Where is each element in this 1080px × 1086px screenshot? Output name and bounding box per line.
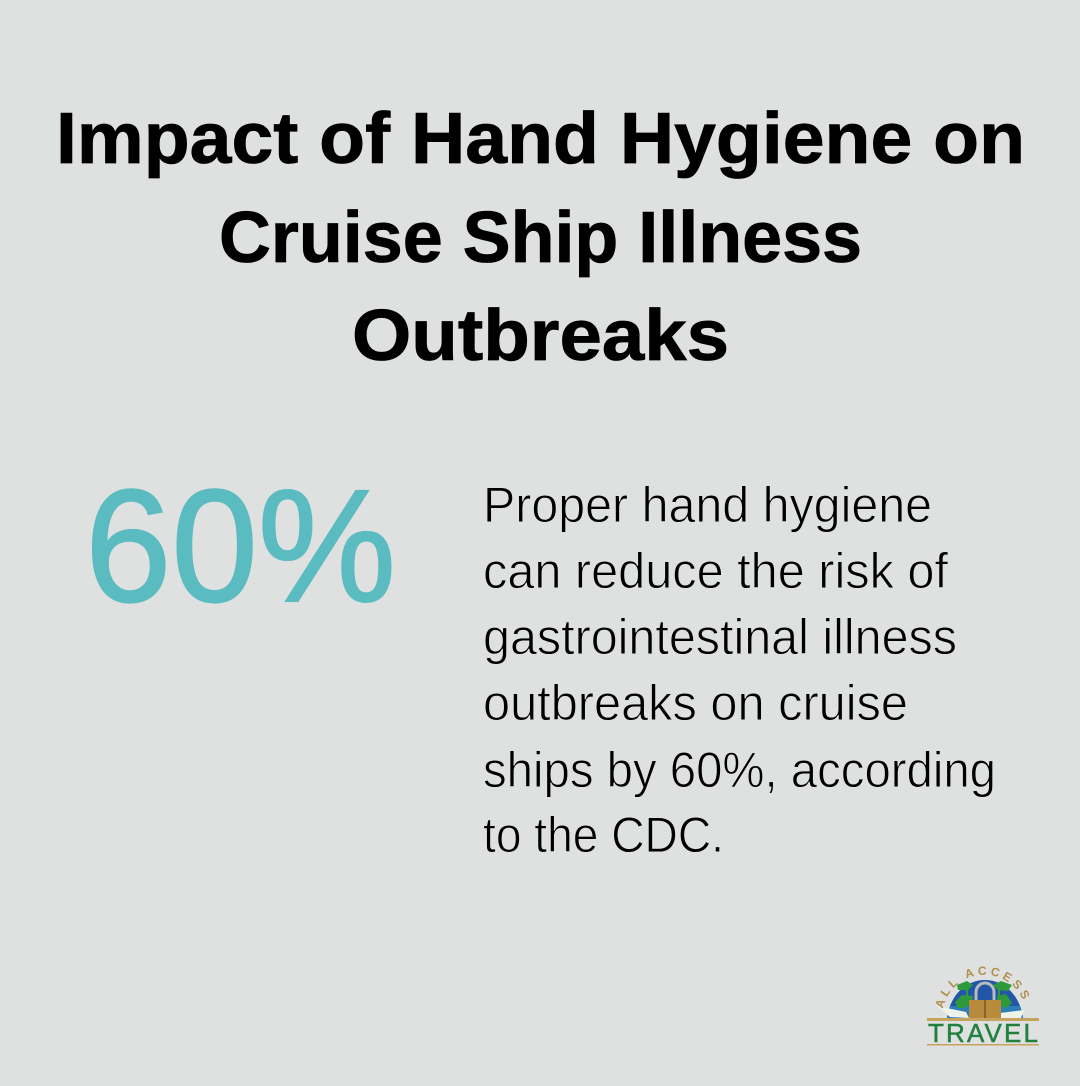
description text block: ships by 60%, according xyxy=(483,742,996,798)
icon: padlock xyxy=(969,983,1001,1018)
title xyxy=(56,99,1025,376)
description text block: to the CDC. xyxy=(483,807,724,863)
title: Cruise Ship Illness xyxy=(219,198,862,278)
big statistic: 60%: 60% xyxy=(85,456,396,635)
icon: yachts xyxy=(937,1006,1024,1018)
description text block: outbreaks on cruise xyxy=(483,675,908,731)
icon: palm trees xyxy=(955,981,1012,1008)
logo rule bottom xyxy=(927,1044,1039,1046)
icon: dome with sky and sea xyxy=(947,980,1023,1018)
logo: All Access Travel xyxy=(927,966,1039,1048)
logo text: ALL ACCESS: ALL ACCESS xyxy=(936,966,1030,1008)
logo text: TRAVEL: TRAVEL xyxy=(928,1018,1038,1048)
logo rule top xyxy=(927,1018,1039,1021)
description text block: can reduce the risk of xyxy=(483,543,948,599)
description text block xyxy=(483,477,996,863)
title: Outbreaks xyxy=(352,296,729,376)
title: Impact of Hand Hygiene on xyxy=(56,99,1025,179)
description text block: gastrointestinal illness xyxy=(483,609,957,665)
description text block: Proper hand hygiene xyxy=(483,477,932,533)
